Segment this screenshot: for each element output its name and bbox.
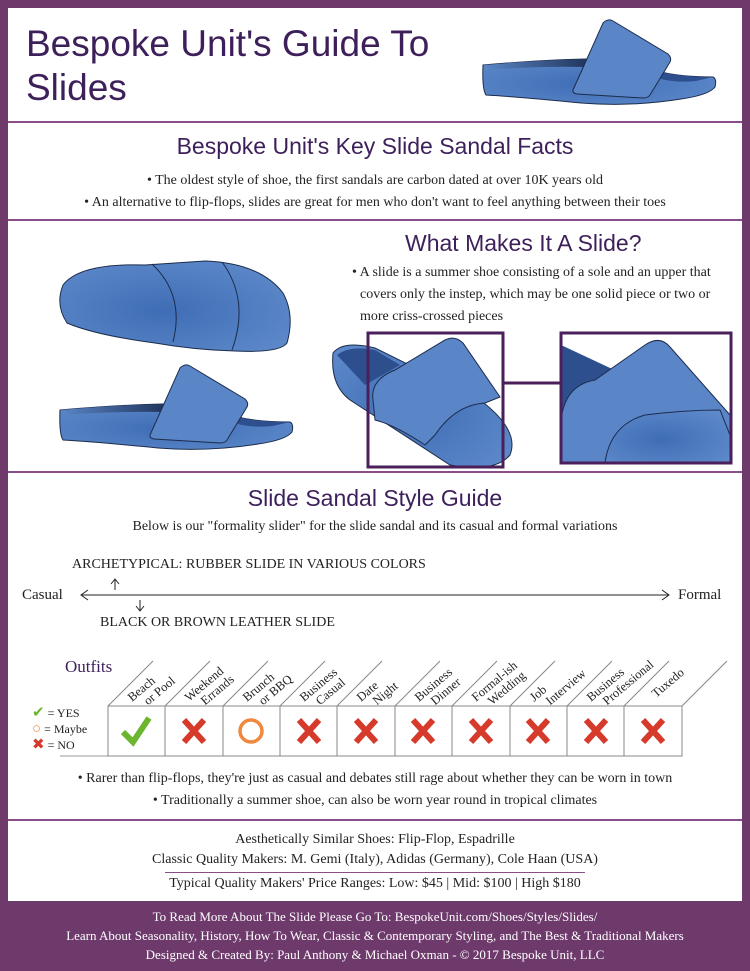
text: bottom bullets: • Rarer than flip-flops, they're just as casual and debates still rage about whether they can be worn in town xyxy=(78,771,672,786)
formality slider: Casual xyxy=(22,587,63,603)
text: price ranges: Typical Quality Makers' Price Ranges: Low: $45 | Mid: $100 | High $180 xyxy=(169,876,581,891)
text: key facts: • The oldest style of shoe, the first sandals are carbon dated at over 10K years old xyxy=(147,173,603,188)
formality slider: BLACK OR BROWN LEATHER SLIDE xyxy=(100,615,335,630)
text: similar shoes and makers: Aesthetically Similar Shoes: Flip-Flop, Espadrille xyxy=(235,832,515,847)
outfits table: Interview xyxy=(543,666,589,708)
text: definition: • A slide is a summer shoe consisting of a sole and an upper that covers only the instep, which may be one solid piece or two or more criss-crossed pieces xyxy=(352,265,711,324)
icon: angled slide with zoom boxes xyxy=(332,332,732,468)
heading: what makes it a slide: What Makes It A Slide? xyxy=(405,230,642,256)
text: bottom bullets xyxy=(78,771,672,808)
outfits table: Business xyxy=(412,665,455,704)
icon: side view slide xyxy=(59,364,294,450)
outfits label: Outfits xyxy=(65,657,112,676)
outfits table: Beach xyxy=(125,673,158,704)
text: similar shoes and makers xyxy=(152,832,598,867)
formality slider xyxy=(22,557,721,630)
legend xyxy=(32,705,87,753)
legend: ✖ = NO xyxy=(32,737,75,753)
outfits table: Casual xyxy=(313,675,348,708)
formality slider: Formal xyxy=(678,587,721,603)
icon: top view slide xyxy=(59,260,291,352)
text: key facts: • An alternative to flip-flops, slides are great for men who don't want to feel anything between their toes xyxy=(84,195,666,210)
outfits table: Night xyxy=(370,678,401,708)
text: similar shoes and makers: Classic Quality Makers: M. Gemi (Italy), Adidas (Germany), Cole Haan (USA) xyxy=(152,852,598,867)
text: bottom bullets: • Traditionally a summer shoe, can also be worn year round in tropical climates xyxy=(153,793,597,808)
outfits table: Errands xyxy=(198,672,237,708)
heading: style guide: Slide Sandal Style Guide xyxy=(248,485,502,511)
outfits table: or BBQ xyxy=(256,672,295,708)
footer xyxy=(66,909,684,962)
outfits table: or Pool xyxy=(141,673,178,708)
outfits table: Brunch xyxy=(240,670,277,704)
footer: Designed & Created By: Paul Anthony & Michael Oxman - © 2017 Bespoke Unit, LLC xyxy=(146,947,604,962)
outfits table xyxy=(60,657,728,756)
outfits table: Wedding xyxy=(485,668,529,708)
outfits table: Tuxedo xyxy=(649,665,687,700)
outfits table: Dinner xyxy=(428,674,464,708)
outfits table: Job xyxy=(527,682,549,704)
outfits table: Business xyxy=(297,665,340,704)
outfits table: Professional xyxy=(600,657,657,708)
legend: ✔ = YES xyxy=(32,705,80,721)
text: key facts xyxy=(84,173,666,210)
heading: key facts: Bespoke Unit's Key Slide Sandal Facts xyxy=(177,133,573,159)
text: subtitle: Below is our "formality slider" for the slide sandal and its casual and formal variations xyxy=(132,519,617,534)
outfits table: Formal-ish xyxy=(469,658,520,704)
icon: header slide xyxy=(482,19,716,105)
footer: To Read More About The Slide Please Go To: BespokeUnit.com/Shoes/Styles/Slides/ xyxy=(153,909,597,924)
outfits table: Weekend xyxy=(182,664,226,704)
outfits table: Date xyxy=(354,678,381,704)
footer: Learn About Seasonality, History, How To Wear, Classic & Contemporary Styling, and The Best & Traditional Makers xyxy=(66,928,684,943)
legend: ○ = Maybe xyxy=(32,721,87,737)
title: Bespoke Unit's Guide To Slides xyxy=(26,23,429,108)
formality slider: ARCHETYPICAL: RUBBER SLIDE IN VARIOUS COLORS xyxy=(72,557,426,572)
outfits table: Business xyxy=(584,665,627,704)
